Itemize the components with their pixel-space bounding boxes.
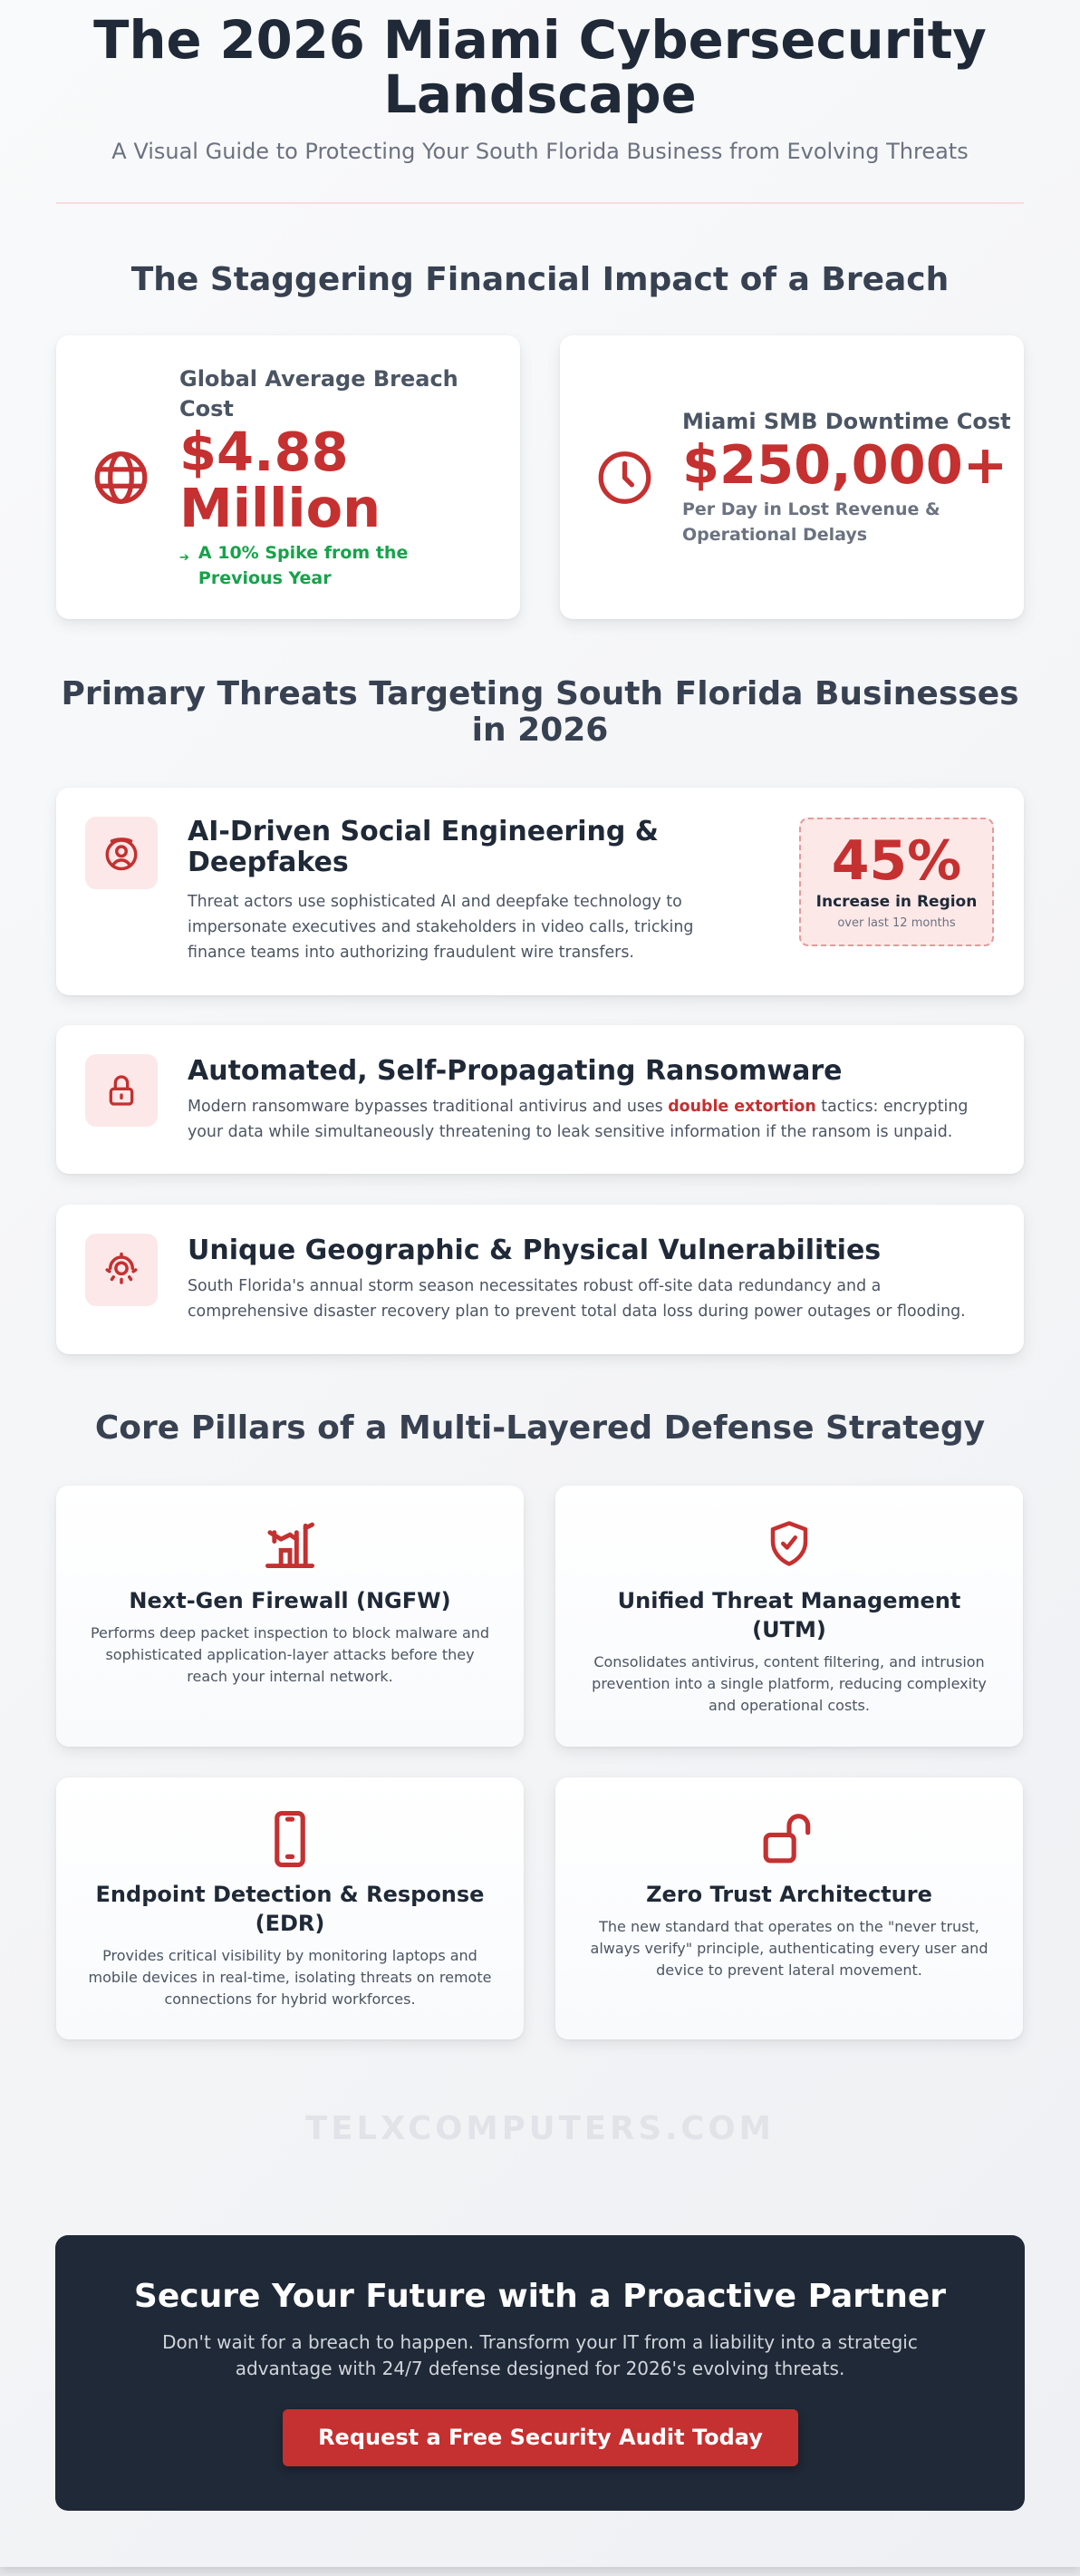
stat text: [682, 409, 1011, 545]
stat text: $4.88 Million: [179, 421, 381, 538]
stat text: [179, 366, 458, 587]
heading: primary threats: Primary Threats Targeting South Florida Businesses: [61, 675, 1019, 712]
panel: call to action: [55, 2235, 1025, 2511]
stat callout: 45%: 45%: [832, 829, 961, 893]
title: The 2026 Miami Cybersecurity: [93, 10, 987, 71]
panel: Zero Trust: The new standard that operates on the "never trust, always verify" principle, authenticating every user and device to prevent lateral movement.: [591, 1918, 988, 1979]
stat text: Per Day in Lost Revenue &: [682, 499, 940, 519]
title: [93, 10, 987, 125]
panel: EDR: Provides critical visibility by monitoring laptops and mobile devices in real-time, isolating threats on remote connections for hybrid workforces.: [89, 1947, 491, 2008]
panel: UTM: [555, 1486, 1023, 1747]
subtitle: A Visual Guide to Protecting Your South Florida Business from Evolving Threats: [111, 139, 969, 164]
stat text: Global Average Breach Cost: [179, 366, 458, 421]
panel: downtime cost: [560, 335, 1024, 619]
panel: EDR: Endpoint Detection & Response (EDR): [96, 1882, 484, 1936]
panel: UTM: Unified Threat Management (UTM): [618, 1588, 960, 1642]
stat text: $250,000+: [682, 433, 1008, 496]
icon: globe: [94, 451, 147, 504]
threat text: Modern ransomware bypasses traditional antivirus and uses double extortion tactics: encrypting your data while simultaneously threatening to leak sensitive information if the ransom is unpaid.: [188, 1098, 968, 1141]
CTA heading: Secure Your Future with a Proactive Partner: [134, 2278, 946, 2315]
stat text: A 10% Spike from the Previous Year: [198, 542, 408, 587]
panel: Zero Trust: Zero Trust Architecture: [646, 1882, 932, 1907]
icon: shield check: [770, 1521, 808, 1566]
stat callout: 45%: over last 12 months: [837, 916, 956, 930]
CTA text: Don't wait for a breach to happen. Transform your IT from a liability into a strategic advantage with 24/7 defense designed for 2026's evolving threats.: [162, 2331, 918, 2379]
panel: geographic vulnerabilities: [56, 1205, 1024, 1354]
heading: financial impact: The Staggering Financial Impact of a Breach: [131, 261, 949, 298]
threat text: Unique Geographic & Physical Vulnerabilities: [188, 1235, 881, 1266]
icon: firewall: [265, 1523, 314, 1568]
heading: primary threats: in 2026: [472, 712, 608, 749]
heading: core pillars: Core Pillars of a Multi-Layered Defense Strategy: [95, 1409, 985, 1447]
threat text: [188, 1055, 968, 1141]
stat text: Miami SMB Downtime Cost: [682, 409, 1011, 434]
title: Landscape: [383, 64, 697, 125]
stat text: Operational Delays: [682, 525, 867, 545]
panel: NGFW: Performs deep packet inspection to block malware and sophisticated application-layer attacks before they reach your internal network.: [91, 1624, 489, 1685]
panel: NGFW: [56, 1486, 524, 1747]
threat text: South Florida's annual storm season necessitates robust off-site data redundancy and a comprehensive disaster recovery plan to prevent total data loss during power outages or flooding.: [188, 1277, 966, 1321]
stat callout: 45%: [799, 818, 994, 946]
watermark: TELXCOMPUTERS.COM: [305, 2110, 775, 2147]
threat text: [188, 1235, 966, 1321]
threat text: Automated, Self-Propagating Ransomware: [188, 1055, 843, 1087]
panel: UTM: Consolidates antivirus, content filtering, and intrusion prevention into a single platform, reducing complexity and operational costs.: [592, 1653, 987, 1714]
button: Request a Free Security Audit Today: [318, 2425, 763, 2450]
icon: clock: [598, 451, 651, 504]
stat callout: 45%: Increase in Region: [816, 893, 977, 911]
panel: global breach cost: [56, 335, 520, 619]
icon: lock: [85, 1054, 158, 1127]
threat text: Threat actors use sophisticated AI and deepfake technology to impersonate executives and stakeholders in video calls, tricking finance teams into authorizing fraudulent wire transfers.: [188, 893, 693, 962]
threat text: AI-Driven Social Engineering & Deepfakes: [188, 816, 659, 878]
icon: storm: [85, 1234, 158, 1306]
heading: primary threats: [61, 675, 1019, 749]
panel: Zero Trust: [555, 1777, 1023, 2039]
panel: ransomware: [56, 1025, 1024, 1174]
icon: unlocked padlock: [763, 1814, 810, 1864]
button: [283, 2409, 798, 2466]
panel: AI social engineering: [56, 788, 1024, 995]
panel: EDR: [56, 1777, 524, 2039]
icon: user: [85, 817, 158, 889]
icon: phone: [275, 1811, 305, 1867]
threat text: [187, 816, 693, 962]
panel: NGFW: Next-Gen Firewall (NGFW): [129, 1588, 451, 1613]
stat text: ➔: [179, 551, 189, 564]
